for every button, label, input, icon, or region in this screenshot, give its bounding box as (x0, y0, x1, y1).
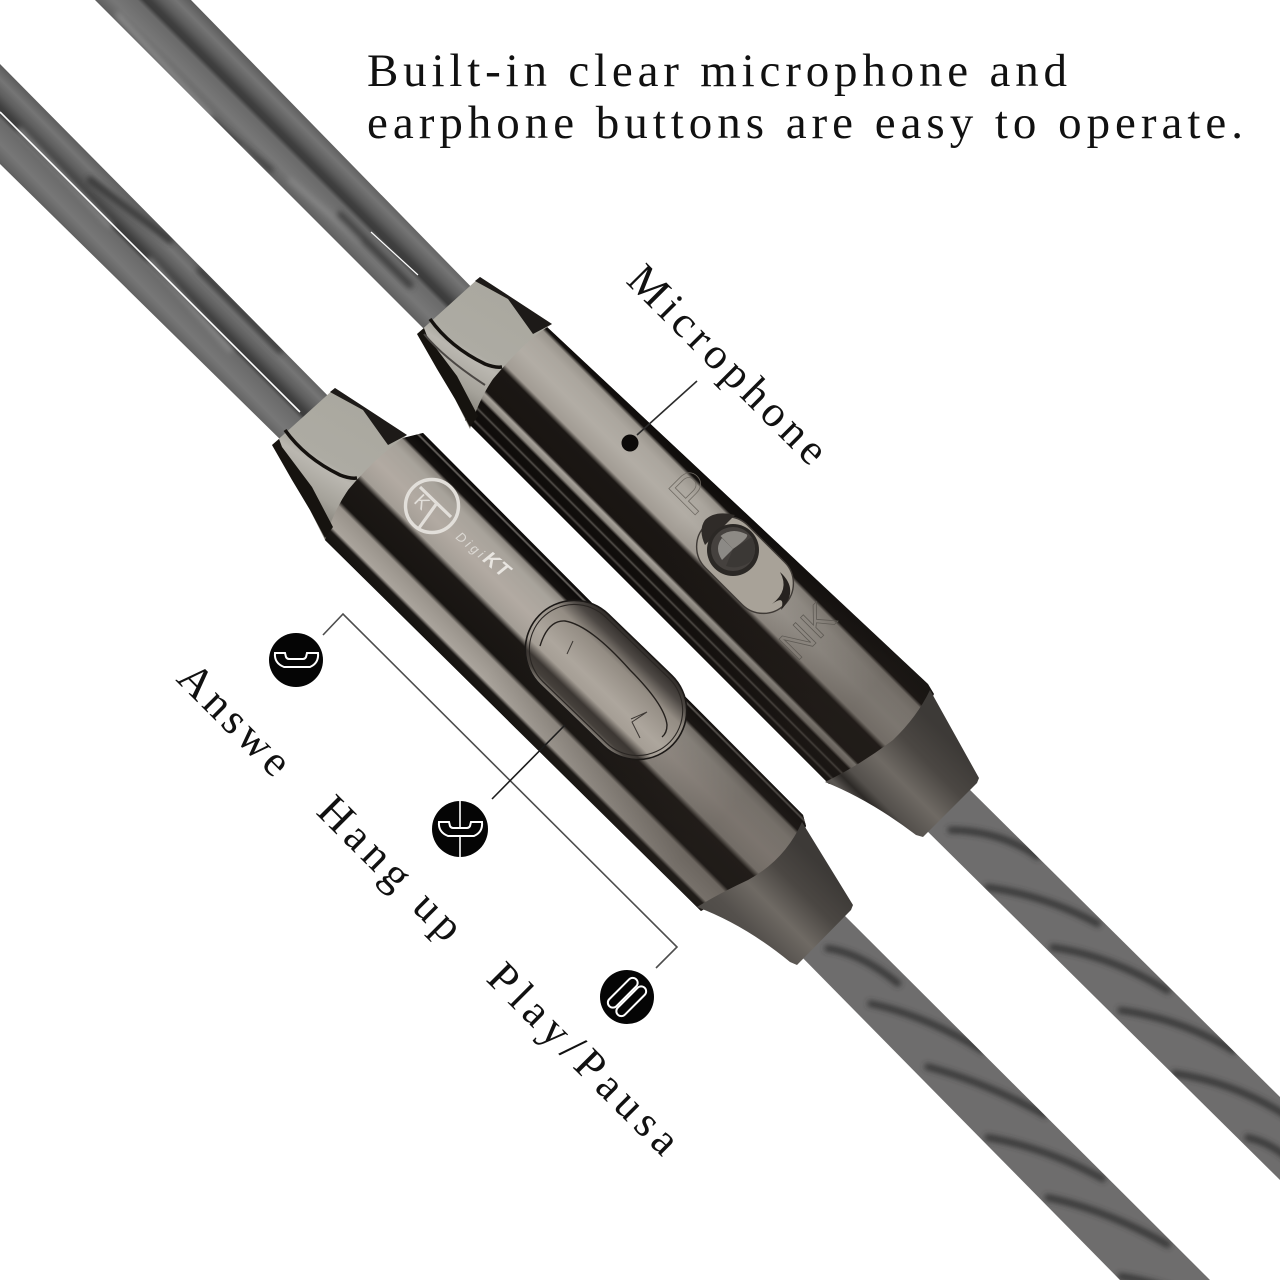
earphone control: left body (325, 433, 806, 911)
cables: upper pairs (0, 0, 483, 451)
heading (367, 45, 1243, 149)
button pill (505, 580, 707, 780)
microphone hole (622, 434, 638, 452)
bracket: answer to play/pause (323, 614, 677, 968)
engraved letter P: P (658, 459, 726, 526)
brand wordmark (452, 525, 516, 583)
leader line: hang up (492, 725, 565, 799)
label: Answe: Answe (168, 652, 302, 786)
brand logo (406, 480, 458, 532)
left end cap (697, 822, 853, 965)
right strain-relief collar (417, 277, 552, 429)
brand logo: K (409, 491, 434, 515)
brand wordmark: Digi (453, 529, 488, 562)
icon: answer (269, 633, 323, 687)
heading: earphone buttons are easy to operate. (367, 97, 1243, 149)
engraved letters NK: NK (770, 594, 845, 668)
label: Microphone: Microphone (618, 254, 838, 474)
slide switch (684, 504, 806, 626)
heading: Built-in clear microphone and (367, 45, 1067, 97)
right end cap (825, 690, 979, 837)
icon: hang up (432, 801, 488, 857)
brand wordmark: KT (479, 547, 516, 583)
icon: play/pause (600, 970, 654, 1024)
label: Hang up: Hang up (308, 785, 473, 951)
cables: lower pair with twisted stripes (792, 778, 1280, 1280)
earphone control: right body (465, 327, 934, 784)
left strain-relief collar (272, 388, 407, 540)
leader line: microphone (637, 381, 697, 435)
label: Play/Pausa: Play/Pausa (478, 952, 690, 1165)
